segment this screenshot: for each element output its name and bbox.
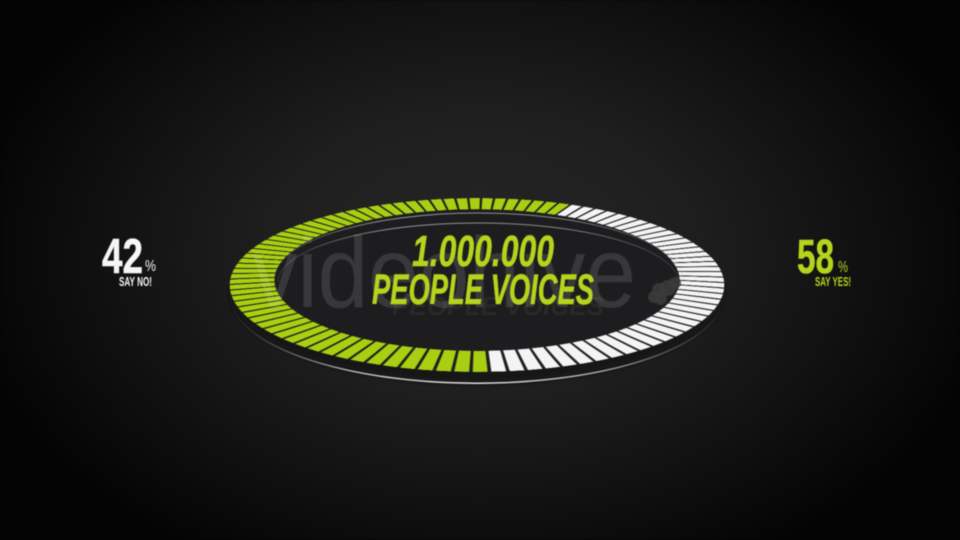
left percent sign: % [145, 258, 156, 275]
headline number: 1.000.000 [412, 227, 554, 276]
right caption: SAY YES! [815, 275, 851, 289]
headline label: PEOPLE VOICES [372, 266, 594, 314]
reflection of the headline: PEOPLE VOICES [392, 291, 605, 321]
white arc segments: 42% [223, 201, 749, 366]
right percentage: 58 [797, 231, 834, 284]
green arc segments: 58% [223, 201, 749, 366]
left percentage: 42 [102, 230, 143, 284]
left caption: SAY NO! [119, 275, 152, 289]
right percent sign: % [838, 259, 848, 276]
icon: watermark leaf [648, 277, 681, 305]
watermark: videohive [252, 217, 636, 329]
